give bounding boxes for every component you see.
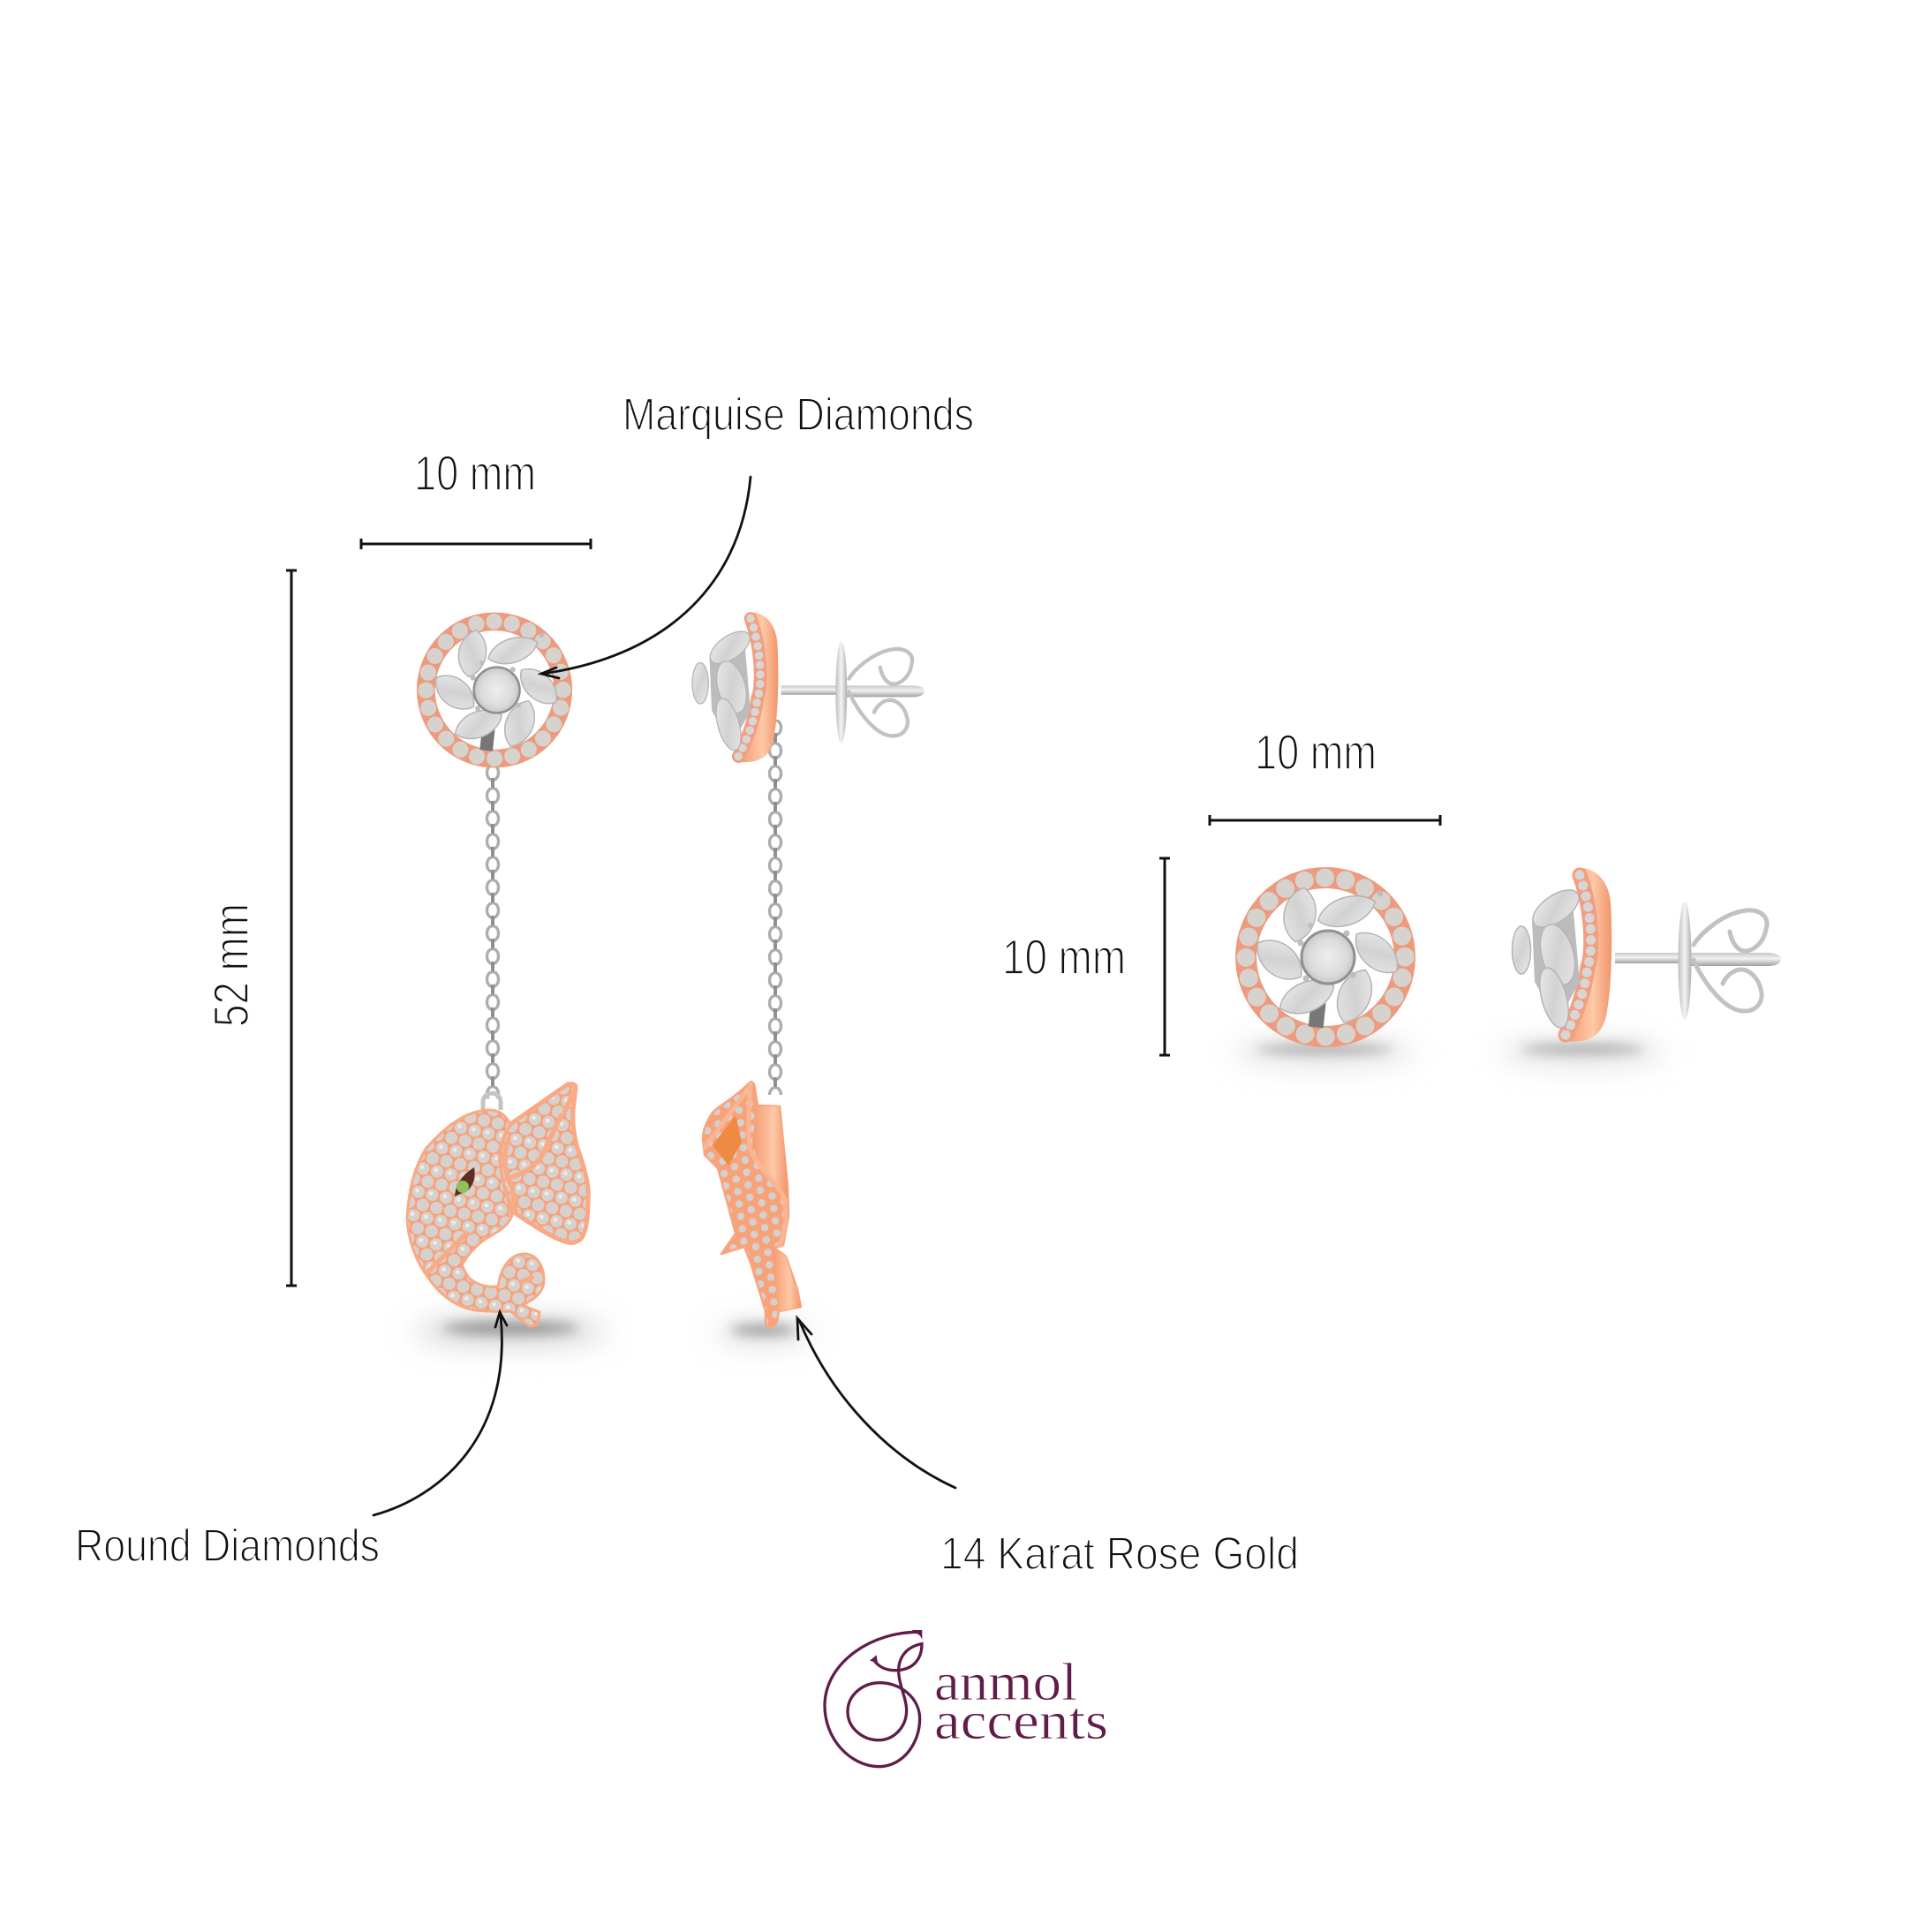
chain: side — [767, 720, 783, 1095]
earring: side view drop — [692, 613, 924, 1326]
stud: side top — [692, 613, 924, 762]
chain: front — [485, 765, 501, 1098]
logo: anmol accents: accents — [934, 1692, 1108, 1750]
elephant: rose gold details — [426, 1091, 574, 1282]
shadow: front elephant — [413, 1317, 608, 1346]
label: 52 mm: 52 mm — [203, 903, 259, 1027]
shadow: stud front — [1232, 1040, 1417, 1065]
bail — [483, 1093, 501, 1110]
elephant: lower plate — [773, 1247, 801, 1311]
dimension bar: earring width — [361, 539, 591, 549]
shadow: stud side — [1498, 1040, 1666, 1065]
shadow: side elephant — [715, 1324, 812, 1342]
label: Round Diamonds: Round Diamonds — [75, 1521, 380, 1572]
label: stud width 10 mm: 10 mm — [1255, 724, 1377, 780]
label: 14 Karat Rose Gold: 14 Karat Rose Gold — [940, 1528, 1299, 1580]
logo: anmol accents — [825, 1630, 1108, 1767]
elephant: back plate — [752, 1106, 788, 1198]
stud: front top — [426, 622, 564, 758]
elephant: ear — [500, 1084, 588, 1242]
dimension bar: stud width — [1210, 815, 1440, 826]
stud earring: side view — [1512, 868, 1781, 1042]
elephant: eye — [455, 1167, 475, 1196]
dimension bar: earring height — [286, 570, 297, 1286]
arrow: Round Diamonds — [374, 1312, 507, 1515]
elephant: head and trunk — [407, 1110, 544, 1326]
label: top width 10 mm: 10 mm — [414, 445, 536, 501]
elephant: inner wedge — [713, 1115, 742, 1166]
elephant: side body — [703, 1082, 801, 1326]
elephant: rim lines — [705, 1083, 786, 1246]
stud earring: front view — [1246, 878, 1407, 1037]
label: Marquise Diamonds: Marquise Diamonds — [623, 389, 974, 441]
arrow: 14 Karat Rose Gold — [797, 1318, 955, 1488]
logo wordmark: anmol — [934, 1653, 1077, 1711]
label: stud height 10 mm: 10 mm — [1002, 929, 1126, 985]
dimension bar: stud height — [1159, 858, 1170, 1055]
logo mark — [825, 1630, 922, 1767]
earring: front view drop — [407, 622, 588, 1326]
arrow: Marquise Diamonds — [541, 477, 751, 678]
